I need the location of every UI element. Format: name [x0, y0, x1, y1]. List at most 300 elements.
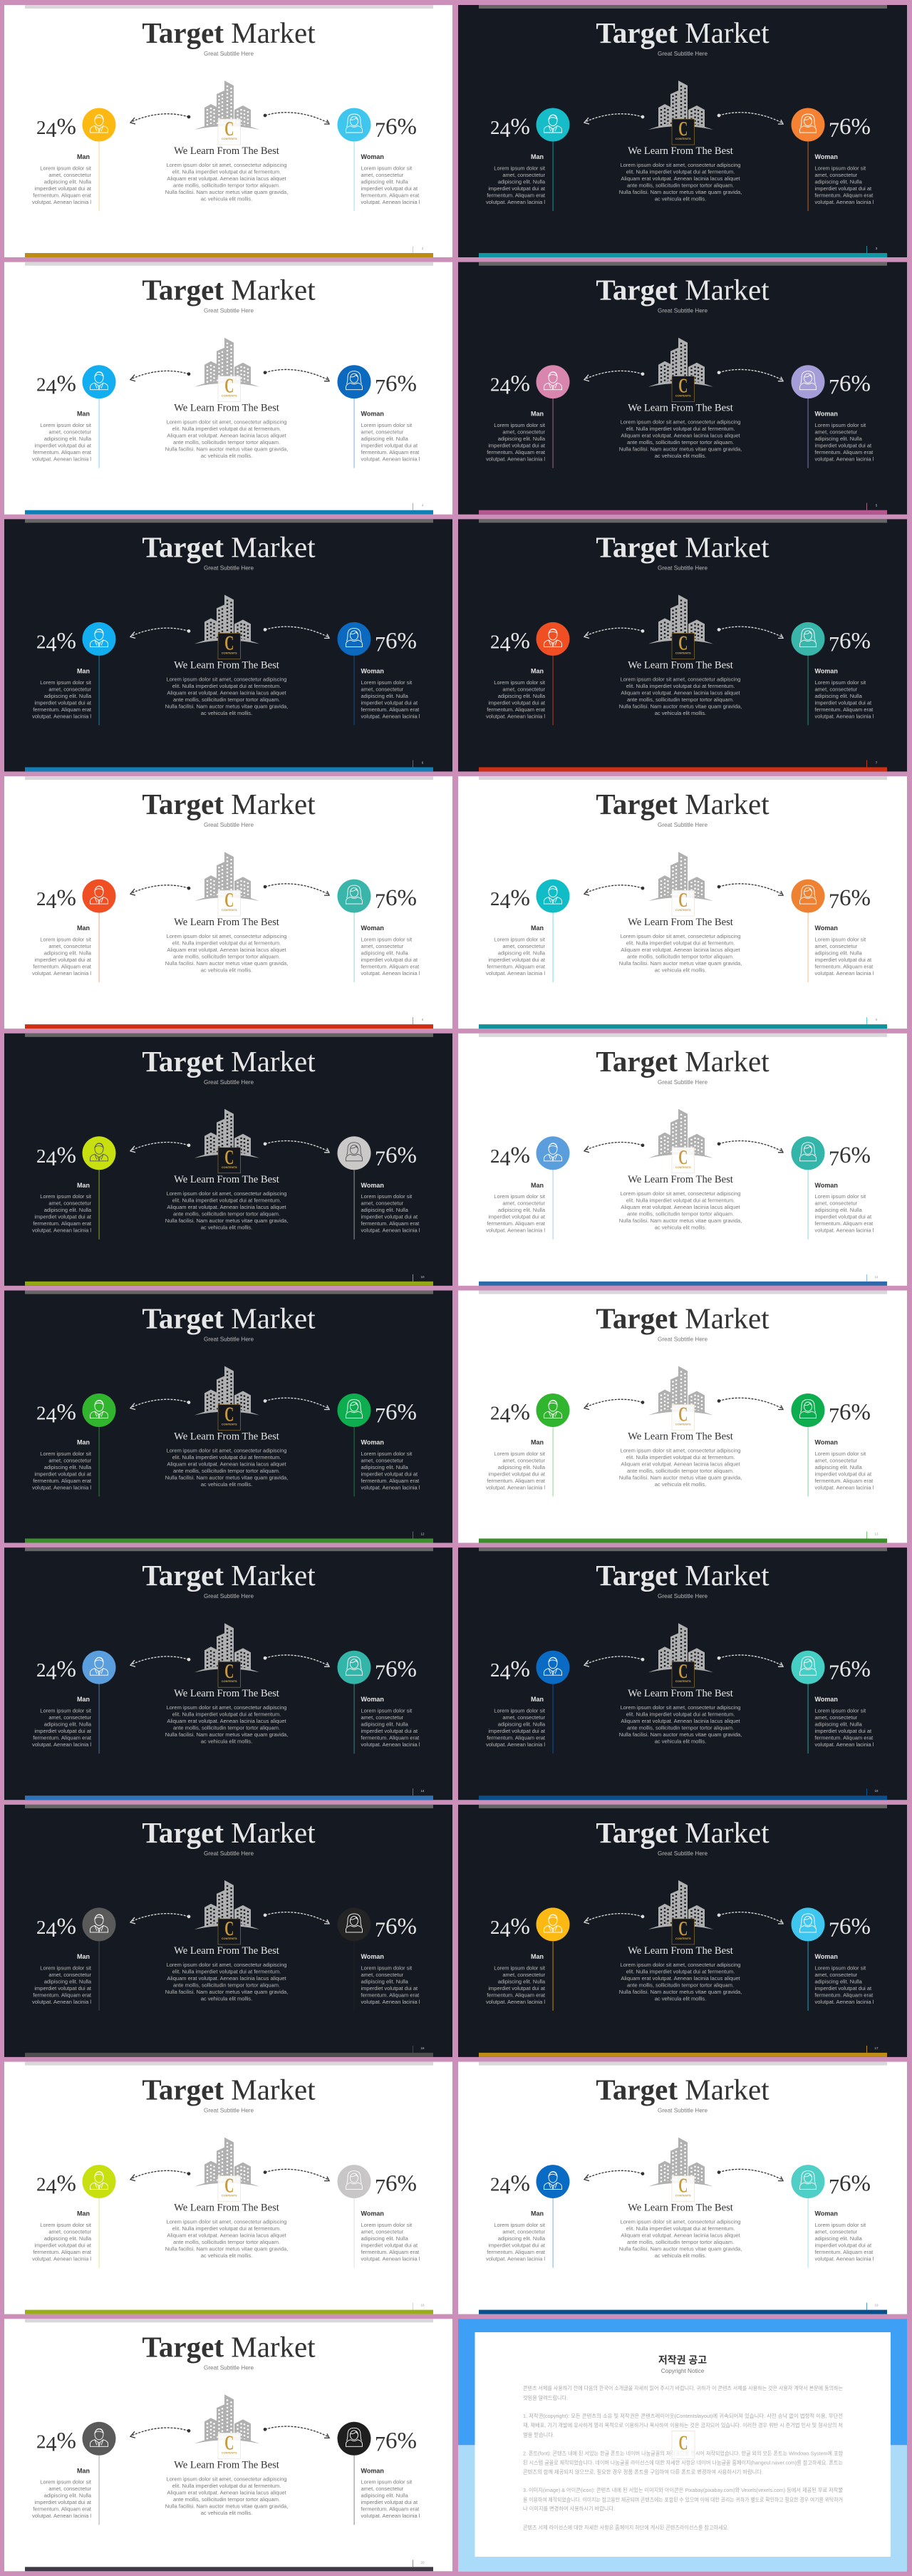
man text: fermentum. Aliquam erat	[487, 192, 546, 198]
center text: Nulla facilisi. Nam auctor metus vitae quam gravida,	[619, 960, 742, 967]
woman text: adipiscing elit. Nulla	[815, 1721, 863, 1728]
woman text: fermentum. Aliquam erat	[361, 1220, 420, 1227]
woman text: fermentum. Aliquam erat	[361, 2506, 420, 2513]
arrows	[130, 1398, 329, 1410]
illustration: buildings	[195, 1880, 259, 1930]
man percent: %	[57, 2171, 76, 2197]
woman text: adipiscing elit. Nulla	[815, 949, 863, 956]
man text: volutpat. Aenean lacinia l	[486, 1741, 545, 1748]
arrows	[130, 1141, 329, 1153]
center heading: We Learn From The Best	[174, 1945, 279, 1957]
panel: slide 6	[4, 519, 452, 771]
woman text: amet, consectetur	[361, 1200, 404, 1207]
center text: elit. Nulla imperdiet volutpat dui at fermentum.	[172, 2225, 281, 2232]
center text: Aliquam erat volutpat. Aenean lacinia lacus aliquet	[621, 1204, 741, 1210]
center text: Nulla facilisi. Nam auctor metus vitae quam gravida,	[619, 446, 742, 453]
title: Target Market	[142, 1816, 316, 1849]
arrows	[130, 369, 329, 381]
woman text: volutpat. Aenean lacinia l	[815, 1227, 874, 1234]
logo: CONTENTS	[222, 1937, 237, 1940]
man percent: 4	[500, 632, 510, 656]
center text: ac vehicula elit mollis.	[655, 1224, 706, 1230]
panel: slide 12	[4, 1290, 452, 1542]
logo	[672, 632, 694, 659]
woman percent: %	[398, 628, 417, 654]
woman text: imperdiet volutpat dui at	[815, 443, 872, 449]
center heading: We Learn From The Best	[174, 145, 279, 157]
man text: adipiscing elit. Nulla	[498, 2235, 546, 2242]
man marker	[536, 1393, 570, 1497]
man text: imperdiet volutpat dui at	[488, 185, 546, 192]
illustration: buildings	[195, 338, 259, 387]
woman marker	[338, 2165, 370, 2268]
woman text: Lorem ipsum dolor sit	[815, 936, 866, 942]
subtitle: Great Subtitle Here	[204, 822, 254, 828]
subtitle: Great Subtitle Here	[204, 51, 254, 57]
man percent: 4	[500, 1404, 510, 1427]
woman percent: 6	[385, 2171, 398, 2197]
woman percent: %	[851, 1657, 871, 1682]
panel: slide 2	[4, 5, 452, 257]
woman text: amet, consectetur	[361, 2485, 404, 2492]
man heading: Man	[77, 924, 90, 932]
center text: ac vehicula elit mollis.	[201, 195, 252, 202]
panel: slide 18	[4, 2062, 452, 2314]
subtitle: Great Subtitle Here	[658, 822, 708, 828]
center text: elit. Nulla imperdiet volutpat dui at fermentum.	[626, 1197, 735, 1203]
man text: fermentum. Aliquam erat	[33, 1220, 92, 1227]
woman percent: %	[851, 885, 871, 911]
logo: CONTENTS	[675, 908, 691, 912]
woman text: Lorem ipsum dolor sit	[815, 422, 866, 428]
man percent: 4	[46, 1661, 57, 1684]
arrows	[584, 1912, 783, 1924]
man text: adipiscing elit. Nulla	[498, 1207, 546, 1213]
panel: slide 16	[4, 1805, 452, 2057]
man text: adipiscing elit. Nulla	[44, 1978, 92, 1984]
illustration: buildings	[648, 81, 713, 130]
man percent: %	[57, 371, 76, 397]
panel: slide 13	[458, 1290, 907, 1542]
woman text: amet, consectetur	[815, 1200, 858, 1207]
logo: CONTENTS	[222, 137, 237, 140]
man text: imperdiet volutpat dui at	[488, 699, 546, 706]
center heading: We Learn From The Best	[628, 1431, 733, 1443]
woman text: volutpat. Aenean lacinia l	[815, 1999, 874, 2005]
woman text: adipiscing elit. Nulla	[361, 1464, 409, 1470]
title: Target Market	[596, 1302, 770, 1334]
man text: Lorem ipsum dolor sit	[40, 936, 92, 942]
man percent: 2	[36, 2174, 46, 2195]
center text: ante mollis, sollicitudin tempor tortor aliquam.	[173, 1982, 280, 1988]
page number: 8	[422, 1018, 424, 1021]
center text: elit. Nulla imperdiet volutpat dui at fermentum.	[626, 1968, 735, 1974]
man percent: %	[510, 371, 530, 397]
man percent: 2	[36, 888, 46, 910]
center text: Lorem ipsum dolor sit amet, consectetur adipiscing	[167, 2475, 286, 2482]
man percent: 2	[490, 1659, 500, 1681]
man text: volutpat. Aenean lacinia l	[486, 713, 545, 719]
center text: elit. Nulla imperdiet volutpat dui at fermentum.	[626, 168, 735, 175]
arrows	[130, 113, 329, 124]
subtitle: Great Subtitle Here	[204, 2364, 254, 2371]
arrows	[584, 1398, 783, 1410]
man percent: 2	[490, 1403, 500, 1424]
center text: Aliquam erat volutpat. Aenean lacinia lacus aliquet	[167, 1204, 287, 1210]
center text: ante mollis, sollicitudin tempor tortor aliquam.	[173, 182, 280, 188]
center text: Aliquam erat volutpat. Aenean lacinia lacus aliquet	[167, 175, 287, 182]
woman heading: Woman	[361, 2210, 384, 2217]
woman percent: 7	[829, 1918, 839, 1942]
woman text: adipiscing elit. Nulla	[815, 693, 863, 699]
man percent: 2	[36, 117, 46, 138]
arrows	[584, 627, 783, 638]
title: Target Market	[142, 1302, 316, 1334]
woman text: volutpat. Aenean lacinia l	[361, 970, 420, 977]
woman heading: Woman	[815, 1696, 838, 1703]
man text: imperdiet volutpat dui at	[34, 2242, 92, 2249]
center text: Aliquam erat volutpat. Aenean lacinia lacus aliquet	[621, 689, 741, 696]
man percent: 4	[46, 890, 57, 913]
man heading: Man	[77, 153, 90, 160]
center heading: We Learn From The Best	[628, 403, 733, 414]
center text: Aliquam erat volutpat. Aenean lacinia lacus aliquet	[621, 2232, 741, 2239]
woman text: volutpat. Aenean lacinia l	[361, 713, 420, 719]
center text: ante mollis, sollicitudin tempor tortor aliquam.	[627, 1725, 734, 1731]
woman text: fermentum. Aliquam erat	[815, 192, 874, 198]
center heading: We Learn From The Best	[174, 917, 279, 928]
woman percent: %	[851, 1400, 871, 1426]
man text: adipiscing elit. Nulla	[44, 1721, 92, 1728]
man text: imperdiet volutpat dui at	[34, 185, 92, 192]
woman heading: Woman	[815, 411, 838, 418]
title: Target Market	[142, 16, 316, 49]
woman text: imperdiet volutpat dui at	[361, 1985, 418, 1992]
man text: imperdiet volutpat dui at	[488, 2242, 546, 2249]
center text: Aliquam erat volutpat. Aenean lacinia lacus aliquet	[167, 689, 287, 696]
logo: C	[678, 632, 688, 654]
panel: slide 3	[458, 5, 907, 257]
man text: fermentum. Aliquam erat	[33, 192, 92, 198]
man text: fermentum. Aliquam erat	[487, 1220, 546, 1227]
man percent: 2	[490, 374, 500, 396]
woman text: adipiscing elit. Nulla	[361, 2235, 409, 2242]
center text: ac vehicula elit mollis.	[655, 1738, 706, 1745]
notice section 1: 재, 재배포, 기기 개발에 유사하게 영리 목적으로 이용하거나 복사하여 이용하는 것은 금지되어 있습니다. 이러한 경우 위반 시 준거법 민사 및 형사상의 처	[523, 2422, 843, 2428]
man text: Lorem ipsum dolor sit	[40, 1964, 92, 1971]
title: Target Market	[596, 788, 770, 820]
arrows	[130, 1655, 329, 1666]
center text: elit. Nulla imperdiet volutpat dui at fermentum.	[626, 1711, 735, 1718]
logo	[218, 1661, 241, 1687]
white notice card	[475, 2332, 891, 2557]
woman percent: 7	[375, 2175, 385, 2199]
man text: imperdiet volutpat dui at	[34, 1985, 92, 1992]
center text: Nulla facilisi. Nam auctor metus vitae quam gravida,	[165, 703, 288, 709]
woman percent: 7	[829, 1404, 839, 1427]
title: Target Market	[596, 1559, 770, 1592]
center text: Aliquam erat volutpat. Aenean lacinia lacus aliquet	[167, 2232, 287, 2239]
man text: amet, consectetur	[48, 429, 91, 436]
man text: amet, consectetur	[502, 172, 545, 178]
page number: 2	[422, 247, 424, 250]
woman text: fermentum. Aliquam erat	[361, 706, 420, 713]
center text: elit. Nulla imperdiet volutpat dui at fermentum.	[172, 1711, 281, 1718]
center text: ac vehicula elit mollis.	[201, 2510, 252, 2516]
woman percent: %	[851, 371, 871, 397]
title: Target Market	[596, 1045, 770, 1078]
man text: volutpat. Aenean lacinia l	[32, 1484, 91, 1490]
woman percent: 6	[839, 114, 851, 140]
subtitle: Great Subtitle Here	[204, 1079, 254, 1086]
logo	[218, 1147, 241, 1173]
page number: 9	[876, 1018, 878, 1021]
center text: elit. Nulla imperdiet volutpat dui at fermentum.	[626, 426, 735, 432]
man text: volutpat. Aenean lacinia l	[32, 970, 91, 977]
man text: volutpat. Aenean lacinia l	[486, 2256, 545, 2262]
man text: adipiscing elit. Nulla	[44, 178, 92, 185]
man percent: 2	[36, 1403, 46, 1424]
woman marker	[791, 365, 825, 468]
logo: CONTENTS	[675, 394, 691, 398]
center text: Nulla facilisi. Nam auctor metus vitae quam gravida,	[619, 1474, 742, 1481]
man text: Lorem ipsum dolor sit	[40, 1708, 92, 1714]
man marker	[536, 880, 570, 982]
man percent: %	[510, 2171, 530, 2197]
notice section 2: 콘텐츠의 함께 제공되지 않으므로, 필요한 경우 정품 폰트를 구입하여 다른 폰트로 변경하여 사용하시기 바랍니다.	[523, 2468, 763, 2475]
woman text: adipiscing elit. Nulla	[815, 436, 863, 442]
center text: elit. Nulla imperdiet volutpat dui at fermentum.	[172, 1454, 281, 1460]
subtitle: Great Subtitle Here	[658, 1336, 708, 1343]
center text: Lorem ipsum dolor sit amet, consectetur adipiscing	[621, 1447, 740, 1454]
subtitle: Great Subtitle Here	[204, 1850, 254, 1857]
woman percent: %	[851, 1143, 871, 1168]
woman percent: 6	[839, 628, 851, 654]
center text: ante mollis, sollicitudin tempor tortor aliquam.	[627, 439, 734, 445]
man text: volutpat. Aenean lacinia l	[32, 1741, 91, 1748]
man text: adipiscing elit. Nulla	[498, 949, 546, 956]
center text: Nulla facilisi. Nam auctor metus vitae quam gravida,	[165, 1989, 288, 1995]
woman marker	[791, 1393, 825, 1497]
woman percent: 7	[829, 1661, 839, 1684]
center text: Aliquam erat volutpat. Aenean lacinia lacus aliquet	[621, 175, 741, 182]
man text: volutpat. Aenean lacinia l	[32, 2256, 91, 2262]
man percent: 2	[490, 2174, 500, 2195]
woman text: fermentum. Aliquam erat	[361, 2249, 420, 2255]
woman text: adipiscing elit. Nulla	[815, 1464, 863, 1470]
center text: Lorem ipsum dolor sit amet, consectetur adipiscing	[621, 162, 740, 168]
woman text: fermentum. Aliquam erat	[361, 963, 420, 969]
man text: volutpat. Aenean lacinia l	[486, 456, 545, 463]
woman text: fermentum. Aliquam erat	[361, 1478, 420, 1484]
man percent: 4	[500, 890, 510, 913]
woman percent: 7	[829, 1147, 839, 1170]
man text: imperdiet volutpat dui at	[34, 443, 92, 449]
woman text: amet, consectetur	[361, 172, 404, 178]
logo	[672, 2431, 695, 2458]
man text: volutpat. Aenean lacinia l	[32, 199, 91, 205]
woman text: fermentum. Aliquam erat	[815, 706, 874, 713]
woman text: Lorem ipsum dolor sit	[815, 679, 866, 686]
arrows	[130, 2169, 329, 2181]
woman text: Lorem ipsum dolor sit	[361, 1451, 413, 1457]
woman text: imperdiet volutpat dui at	[361, 699, 418, 706]
woman percent: 7	[829, 376, 839, 399]
man heading: Man	[77, 2467, 90, 2474]
woman text: Lorem ipsum dolor sit	[361, 1708, 413, 1714]
man text: imperdiet volutpat dui at	[488, 1985, 546, 1992]
center text: Lorem ipsum dolor sit amet, consectetur adipiscing	[621, 1962, 740, 1968]
woman percent: 7	[375, 2432, 385, 2456]
man heading: Man	[531, 411, 544, 418]
woman text: amet, consectetur	[815, 1714, 858, 1721]
woman text: Lorem ipsum dolor sit	[815, 1964, 866, 1971]
woman text: amet, consectetur	[815, 943, 858, 949]
man text: volutpat. Aenean lacinia l	[32, 1999, 91, 2005]
woman text: imperdiet volutpat dui at	[815, 1470, 872, 1477]
man text: Lorem ipsum dolor sit	[494, 1193, 546, 1200]
man percent: %	[510, 628, 530, 654]
notice section 2: 된 시스템 글꼴로 제작되었습니다. 네이버 나눔글꼴 라이선스에 대한 자세한 사항은 네이버 나눔글꼴 홈페이지(hangeul.naver.com)를 참고하세요. 폰트는	[523, 2459, 843, 2466]
man heading: Man	[531, 1438, 544, 1446]
woman text: volutpat. Aenean lacinia l	[361, 1741, 420, 1748]
woman marker	[338, 2422, 370, 2525]
woman percent: 6	[385, 371, 398, 397]
center text: ante mollis, sollicitudin tempor tortor aliquam.	[627, 1468, 734, 1474]
illustration: buildings	[648, 852, 713, 901]
man percent: %	[510, 1914, 530, 1939]
logo: CONTENTS	[675, 137, 691, 140]
woman percent: %	[398, 1400, 417, 1426]
woman percent: 7	[375, 1404, 385, 1427]
center text: ac vehicula elit mollis.	[655, 1995, 706, 2001]
page number: 15	[874, 1789, 879, 1793]
woman text: amet, consectetur	[361, 429, 404, 436]
woman percent: 6	[385, 1143, 398, 1168]
man percent: 2	[36, 1659, 46, 1681]
woman percent: 6	[839, 2171, 851, 2197]
man text: amet, consectetur	[48, 2485, 91, 2492]
man marker	[536, 2165, 570, 2268]
center text: ante mollis, sollicitudin tempor tortor aliquam.	[173, 2239, 280, 2245]
man text: volutpat. Aenean lacinia l	[32, 1227, 91, 1234]
man text: Lorem ipsum dolor sit	[494, 165, 546, 171]
woman text: adipiscing elit. Nulla	[361, 949, 409, 956]
man text: Lorem ipsum dolor sit	[494, 422, 546, 428]
logo: C	[678, 890, 688, 912]
center text: Nulla facilisi. Nam auctor metus vitae quam gravida,	[619, 703, 742, 709]
page number: 4	[422, 504, 424, 508]
logo: C	[224, 1404, 234, 1426]
center text: Lorem ipsum dolor sit amet, consectetur adipiscing	[621, 1704, 740, 1711]
center text: ac vehicula elit mollis.	[201, 710, 252, 716]
logo: CONTENTS	[222, 908, 237, 912]
man text: imperdiet volutpat dui at	[34, 957, 92, 963]
center heading: We Learn From The Best	[628, 1945, 733, 1957]
woman percent: 7	[375, 1918, 385, 1942]
man text: imperdiet volutpat dui at	[34, 1214, 92, 1220]
man percent: %	[510, 114, 530, 140]
logo: CONTENTS	[675, 2194, 691, 2198]
man text: fermentum. Aliquam erat	[487, 2249, 546, 2255]
woman text: Lorem ipsum dolor sit	[815, 1708, 866, 1714]
woman text: volutpat. Aenean lacinia l	[815, 1484, 874, 1490]
center text: Lorem ipsum dolor sit amet, consectetur adipiscing	[621, 2219, 740, 2225]
woman heading: Woman	[361, 1953, 384, 1960]
center text: Nulla facilisi. Nam auctor metus vitae quam gravida,	[165, 2246, 288, 2252]
center text: ante mollis, sollicitudin tempor tortor aliquam.	[627, 1982, 734, 1988]
panel: slide 4	[4, 262, 452, 515]
illustration: buildings	[195, 2394, 259, 2443]
man text: Lorem ipsum dolor sit	[40, 2222, 92, 2228]
center text: ante mollis, sollicitudin tempor tortor aliquam.	[627, 1210, 734, 1217]
title: Target Market	[142, 2073, 316, 2106]
woman text: volutpat. Aenean lacinia l	[815, 199, 874, 205]
woman marker	[338, 365, 370, 468]
center text: Aliquam erat volutpat. Aenean lacinia lacus aliquet	[621, 1718, 741, 1724]
man text: amet, consectetur	[502, 686, 545, 692]
man text: imperdiet volutpat dui at	[34, 1728, 92, 1734]
woman text: imperdiet volutpat dui at	[815, 699, 872, 706]
woman text: Lorem ipsum dolor sit	[815, 165, 866, 171]
page number: 11	[875, 1275, 879, 1279]
woman percent: 7	[375, 890, 385, 913]
center text: Nulla facilisi. Nam auctor metus vitae quam gravida,	[619, 1731, 742, 1738]
page number: 12	[420, 1532, 425, 1535]
man percent: 2	[36, 2431, 46, 2452]
title: Target Market	[596, 16, 770, 49]
woman text: imperdiet volutpat dui at	[815, 1214, 872, 1220]
man text: Lorem ipsum dolor sit	[40, 1193, 92, 1200]
man heading: Man	[77, 411, 90, 418]
notice section 3: 3. 이미지(image) & 아이콘(icon): 콘텐츠 내에 된 서있는 이미지와 아이콘은 Pixabay(pixabay.com)와 Vexels(vexels.com) 등에서 제공된 무료 저작물	[523, 2487, 843, 2493]
man percent: %	[510, 1400, 530, 1426]
center text: ac vehicula elit mollis.	[655, 1481, 706, 1488]
man text: fermentum. Aliquam erat	[487, 1735, 546, 1741]
logo	[672, 1147, 694, 1173]
logo: C	[678, 1404, 688, 1426]
man text: fermentum. Aliquam erat	[487, 1992, 546, 1998]
center text: Nulla facilisi. Nam auctor metus vitae quam gravida,	[619, 1989, 742, 1995]
center text: Lorem ipsum dolor sit amet, consectetur adipiscing	[167, 933, 286, 939]
man text: fermentum. Aliquam erat	[487, 706, 546, 713]
logo: CONTENTS	[222, 1423, 237, 1426]
woman text: amet, consectetur	[815, 1457, 858, 1463]
woman text: imperdiet volutpat dui at	[361, 1728, 418, 1734]
woman percent: 7	[375, 118, 385, 142]
woman text: fermentum. Aliquam erat	[815, 449, 874, 455]
man heading: Man	[531, 1953, 544, 1960]
man marker	[83, 622, 115, 725]
title: Target Market	[142, 274, 316, 306]
woman heading: Woman	[815, 153, 838, 160]
illustration: buildings	[648, 2138, 713, 2187]
title: Target Market	[142, 2330, 316, 2363]
man text: Lorem ipsum dolor sit	[40, 1451, 92, 1457]
woman percent: %	[398, 2428, 417, 2453]
man text: Lorem ipsum dolor sit	[494, 1708, 546, 1714]
subtitle: Great Subtitle Here	[658, 51, 708, 57]
logo: CONTENTS	[675, 1165, 691, 1169]
woman text: amet, consectetur	[815, 429, 858, 436]
panel: slide 10	[4, 1034, 452, 1286]
logo: C	[678, 2432, 688, 2454]
page number: 6	[422, 761, 424, 764]
logo	[218, 890, 241, 916]
woman percent: %	[398, 1143, 417, 1168]
woman percent: 7	[375, 632, 385, 656]
man heading: Man	[77, 1438, 90, 1446]
